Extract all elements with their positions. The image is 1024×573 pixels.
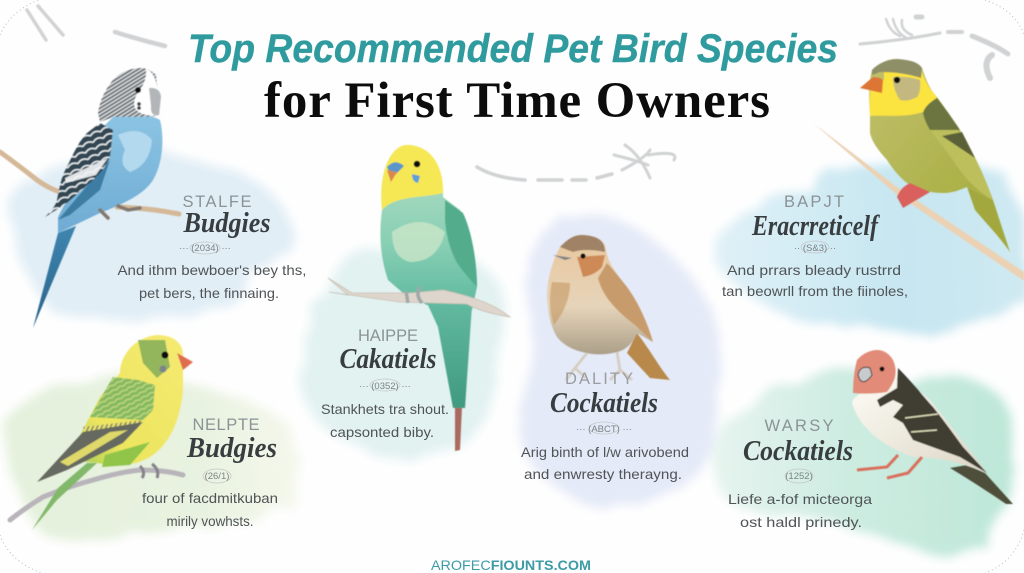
card text: red headed finch: Liefe a-fof micteorga xyxy=(728,491,872,507)
card text: blue budgie: STALFE xyxy=(182,193,252,211)
card text: brown finch: and enwresty therayng. xyxy=(524,466,682,482)
watercolor washes xyxy=(4,151,1024,556)
card text: olive yellow finch: BAPJT xyxy=(784,193,844,211)
card text: blue budgie: And ithm bewboer's bey ths, xyxy=(118,262,306,278)
card text: olive yellow finch: ·· (S&3) ·· xyxy=(794,243,836,254)
card text: yellow green parakeet: mirily vowhsts. xyxy=(166,513,254,529)
card text: green budgie: Cakatiels xyxy=(340,344,437,375)
card text: brown finch xyxy=(521,370,689,482)
card text: yellow green parakeet: four of facdmitkuban xyxy=(142,490,278,506)
card text: olive yellow finch: Eracrreticelf xyxy=(751,211,880,242)
title: Top Recommended Pet Bird Species xyxy=(188,27,838,71)
card text: yellow green parakeet: NELPTE xyxy=(192,416,260,434)
card text: brown finch: Cockatiels xyxy=(550,388,658,419)
footer website: AROFECFIOUNTS.COM xyxy=(431,557,591,573)
card text: red headed finch: WARSY xyxy=(764,417,834,435)
card text: brown finch: DALITY xyxy=(565,370,633,388)
bird: brown finch xyxy=(547,235,670,380)
card text: blue budgie: Budgies xyxy=(183,208,271,239)
decorative sprigs xyxy=(27,6,1008,180)
card text: olive yellow finch xyxy=(722,193,908,299)
title: for First Time Owners xyxy=(264,73,770,129)
card text: blue budgie: pet bers, the finnaing. xyxy=(139,285,279,301)
bird: green budgie xyxy=(328,145,510,451)
card text: green budgie: HAIPPE xyxy=(358,327,418,345)
card text: yellow green parakeet: (26/1) xyxy=(205,471,229,482)
card text: green budgie: ··· (0352) ··· xyxy=(359,381,411,392)
bird: yellow green parakeet xyxy=(10,335,193,530)
card text: olive yellow finch: And prrars bleady rustrrd xyxy=(727,262,901,278)
card text: blue budgie xyxy=(118,193,306,301)
card text: yellow green parakeet: Budgies xyxy=(186,433,277,464)
card text: green budgie xyxy=(321,327,449,440)
card text: green budgie: Stankhets tra shout. xyxy=(321,401,449,417)
card text: red headed finch xyxy=(728,417,872,530)
bird: red headed finch xyxy=(852,350,1013,504)
card text: olive yellow finch: tan beowrll from the fiinoles, xyxy=(722,283,908,299)
card text: yellow green parakeet xyxy=(142,416,278,529)
bird: olive yellow finch xyxy=(813,59,1024,281)
card text: brown finch: ··· (ABCT) ··· xyxy=(576,424,632,435)
card text: blue budgie: ··· (2034) ··· xyxy=(179,243,231,254)
card text: red headed finch: (1252) xyxy=(785,471,813,482)
card text: red headed finch: ost haldl prinedy. xyxy=(740,514,862,530)
card text: red headed finch: Cockatiels xyxy=(743,436,853,467)
card text: brown finch: Arig binth of l/w arivobend xyxy=(521,444,689,460)
card text: green budgie: capsonted biby. xyxy=(330,424,434,440)
bird: blue budgie xyxy=(0,68,179,328)
title xyxy=(188,27,838,129)
